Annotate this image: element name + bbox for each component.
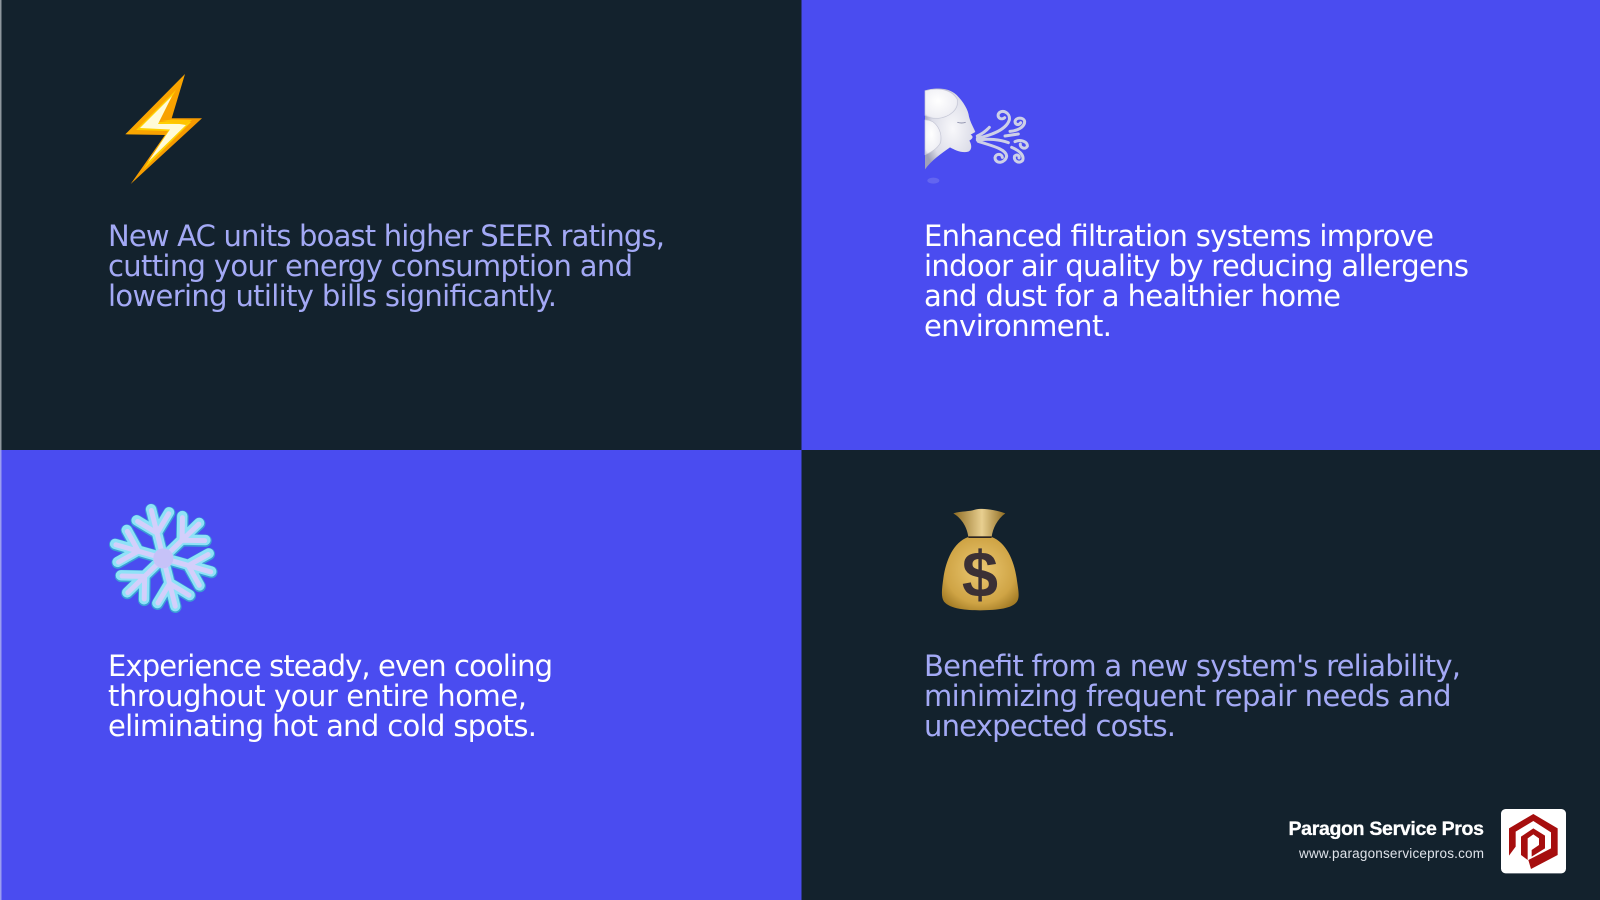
panel: energy efficiency xyxy=(0,0,802,450)
panel: consistent comfort xyxy=(0,450,802,900)
logo xyxy=(1501,809,1566,873)
icon: money bag: $ xyxy=(962,538,998,611)
icon: money bag xyxy=(942,509,1019,611)
brand name: Paragon Service Pros xyxy=(1288,818,1484,840)
brand website: www.paragonservicepros.com xyxy=(1298,846,1484,861)
text: air quality description: and dust for a healthier home xyxy=(924,279,1341,313)
panel: reliability savings xyxy=(802,450,1600,900)
text: reliability description: Benefit from a new system's reliability, xyxy=(924,649,1461,683)
icon: lightning bolt xyxy=(125,74,202,184)
text: reliability description: unexpected costs. xyxy=(924,709,1176,743)
text: comfort description: throughout your entire home, xyxy=(108,679,527,713)
icon: wind face xyxy=(925,89,1027,184)
text: air quality description: Enhanced filtration systems improve xyxy=(924,219,1434,253)
text: comfort description xyxy=(108,649,553,743)
text: reliability description xyxy=(924,649,1461,743)
text: energy efficiency description xyxy=(108,219,665,313)
text: comfort description: eliminating hot and cold spots. xyxy=(108,709,537,743)
text: comfort description: Experience steady, even cooling xyxy=(108,649,553,683)
text: air quality description: environment. xyxy=(924,309,1112,343)
text: energy efficiency description: cutting your energy consumption and xyxy=(108,249,633,283)
text: reliability description: minimizing frequent repair needs and xyxy=(924,679,1452,713)
text: air quality description xyxy=(924,219,1469,343)
panel: air quality xyxy=(802,0,1600,450)
text: energy efficiency description: New AC units boast higher SEER ratings, xyxy=(108,219,665,253)
brand block xyxy=(1288,809,1566,873)
text: energy efficiency description: lowering utility bills significantly. xyxy=(108,279,557,313)
text: air quality description: indoor air quality by reducing allergens xyxy=(924,249,1469,283)
icon: snowflake xyxy=(101,497,226,619)
